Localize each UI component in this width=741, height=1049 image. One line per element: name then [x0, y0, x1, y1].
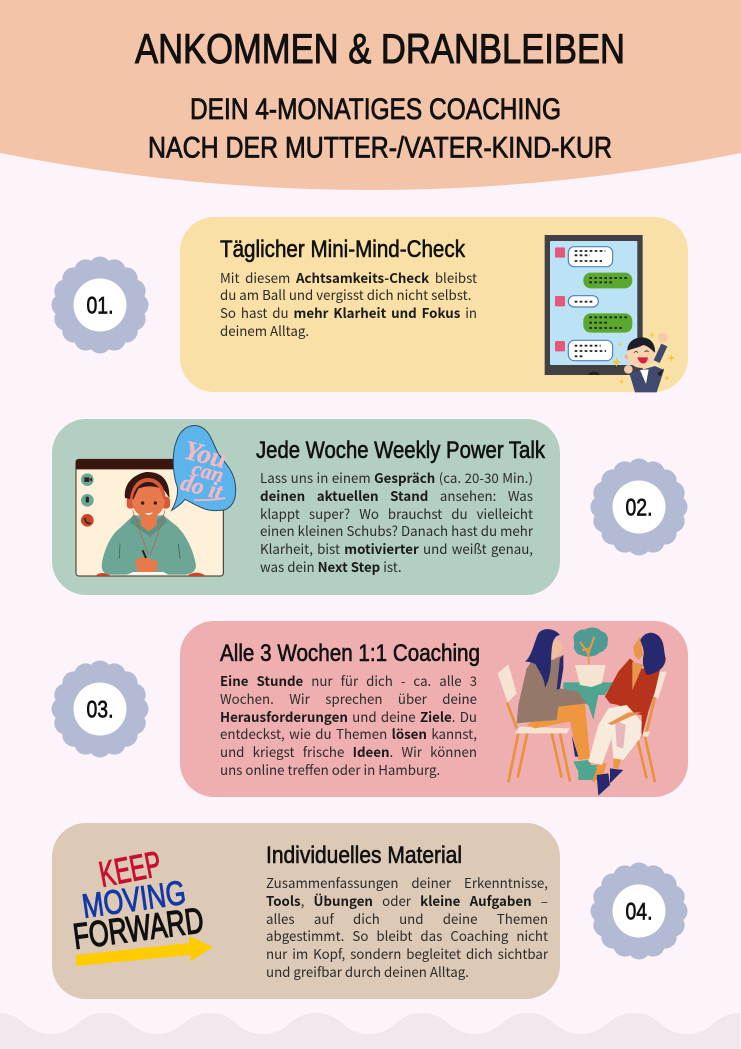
- text block: card 1: du am Ball und vergisst dich nicht selbst.: [220, 285, 471, 304]
- panel: 1:1 coaching: [180, 621, 688, 797]
- text block: card 3: Eine Stunde nur für dich - ca. alle 3: [220, 671, 477, 690]
- badge 04: [590, 862, 688, 960]
- subtitle: NACH DER MUTTER-/VATER-KIND-KUR: [148, 132, 612, 164]
- text block: card 1: So hast du mehr Klarheit und Fokus in: [220, 303, 477, 322]
- bottom wave band: [0, 1013, 740, 1049]
- text block: card 1: [220, 268, 477, 340]
- text block: card 3: entdeckst, wie du Themen lösen kannst,: [220, 724, 477, 743]
- text block: card 2: deinen aktuellen Stand ansehen: Was: [260, 486, 533, 505]
- heading: Individuelles Material: Individuelles Material: [266, 842, 462, 869]
- illustration: video call with speech bubble: can: [189, 456, 226, 487]
- badge 03: [52, 660, 148, 758]
- text block: card 2: Klarheit, bist motivierter und weißt genau,: [260, 539, 533, 558]
- text block: card 4: abgestimmt. So bleibt das Coaching nicht: [266, 926, 548, 945]
- text block: card 2: Lass uns in einem Gespräch (ca. 20-30 Min.): [260, 468, 533, 487]
- badge 01: [52, 256, 148, 354]
- text block: card 2: was dein Next Step ist.: [260, 557, 402, 576]
- text block: card 4: [266, 873, 548, 981]
- badge 02: 02.: [626, 494, 652, 522]
- illustration: video call with speech bubble: [76, 425, 236, 576]
- text block: card 1: deinem Alltag.: [220, 321, 309, 340]
- text block: card 1: Mit diesem Achtsamkeits-Check bleibst: [220, 268, 477, 286]
- heading: Alle 3 Wochen 1:1 Coaching: Alle 3 Wochen 1:1 Coaching: [220, 640, 480, 667]
- illustration: video call with speech bubble: do it: [178, 470, 227, 506]
- text block: card 3: Wochen. Wir sprechen über deine: [220, 689, 477, 708]
- text block: card 4: und greifbar durch deinen Alltag.: [266, 962, 469, 981]
- text block: card 2: einen kleinen Schubs? Danach hast du mehr: [260, 521, 533, 540]
- heading: Täglicher Mini-Mind-Check: Täglicher Mini-Mind-Check: [220, 236, 466, 263]
- text block: card 3: uns online treffen oder in Hamburg.: [220, 760, 440, 779]
- text block: card 3: und kriegst frische Ideen. Wir können: [220, 742, 477, 761]
- icon: phone chat with cheering person: [544, 235, 675, 392]
- badge 03: 03.: [86, 696, 114, 724]
- illustration: keep moving forward lettering with arrow: FORWARD: [71, 899, 206, 957]
- badge 02: [590, 458, 688, 556]
- title: ANKOMMEN & DRANBLEIBEN: [135, 25, 625, 72]
- text block: card 2: [260, 468, 533, 576]
- text block: card 2: klappt super? Wo brauchst du vielleicht: [260, 504, 533, 523]
- illustration: two women talking on chairs: [498, 628, 666, 796]
- text block: card 4: Zusammenfassungen deiner Erkenntnisse,: [266, 873, 548, 892]
- text block: card 4: Tools, Übungen oder kleine Aufgaben –: [266, 891, 548, 910]
- illustration: keep moving forward lettering with arrow: MOVING: [80, 874, 188, 926]
- badge 04: 04.: [626, 898, 652, 926]
- illustration: keep moving forward lettering with arrow: KEEP: [96, 843, 164, 895]
- heading: Jede Woche Weekly Power Talk: Jede Woche Weekly Power Talk: [256, 437, 546, 464]
- panel: daily mini mind check: [180, 217, 688, 392]
- panel: weekly power talk: [52, 419, 560, 595]
- subtitle: [148, 93, 612, 164]
- text block: card 4: nur im Kopf, sondern begleitet dich sichtbar: [266, 944, 548, 963]
- subtitle: DEIN 4-MONATIGES COACHING: [190, 93, 561, 126]
- text block: card 3: Herausforderungen und deine Ziele. Du: [220, 707, 477, 726]
- illustration: video call with speech bubble: You: [181, 435, 230, 474]
- header band: [0, 0, 741, 190]
- panel: individual material: [52, 823, 560, 999]
- text block: card 3: [220, 671, 477, 779]
- badge 01: 01.: [86, 292, 114, 320]
- text block: card 4: alles auf dich und deine Themen: [266, 909, 548, 928]
- illustration: keep moving forward lettering with arrow: [71, 843, 213, 966]
